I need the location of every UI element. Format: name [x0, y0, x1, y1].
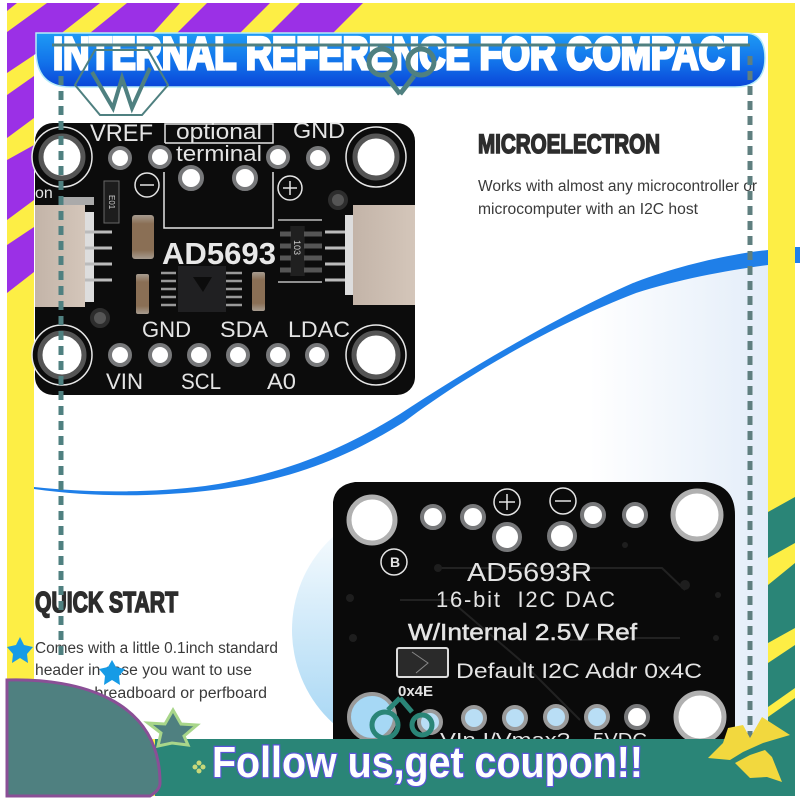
silkscreen labels: VREF — [90, 120, 153, 147]
resistor E01 — [104, 181, 119, 223]
silkscreen text: 0x4E — [398, 683, 433, 700]
silkscreen labels: SCL — [181, 369, 221, 394]
text block: microelectron description: microcomputer with an I2C host — [478, 201, 699, 218]
silkscreen labels: SDA — [220, 317, 268, 342]
terminal outline — [164, 124, 273, 228]
light blue background area under curve — [590, 255, 768, 739]
heading: quick start: QUICK START — [35, 587, 178, 619]
title banner — [36, 28, 765, 87]
text block: microelectron description — [478, 178, 757, 218]
silkscreen text: B — [390, 554, 400, 570]
resistor E01: E01 — [107, 195, 116, 210]
polarity symbols — [135, 173, 302, 200]
part name: AD5693 — [162, 236, 276, 271]
silkscreen text: 5VDC — [593, 730, 647, 750]
rear circuit board — [333, 482, 735, 750]
silkscreen labels: VIN — [106, 369, 143, 394]
silkscreen text: W/Internal 2.5V Ref — [408, 619, 638, 645]
right connector — [325, 205, 415, 305]
resistor array: 103 — [292, 240, 302, 255]
left connector — [35, 197, 112, 307]
watermark knot top — [369, 49, 434, 94]
bottom pads — [110, 345, 327, 365]
icon: blue star middle — [99, 660, 125, 685]
top pads — [422, 504, 646, 550]
icon: teal star — [148, 710, 197, 746]
fiducial dots — [92, 192, 346, 326]
silkscreen labels: A0 — [267, 369, 296, 394]
bottom coupon bar — [155, 739, 795, 796]
silkscreen text — [390, 554, 702, 750]
polarity symbols — [381, 488, 576, 575]
capacitors — [132, 215, 265, 314]
heading: microelectron: MICROELECTRON — [478, 129, 660, 159]
mounting holes — [349, 491, 724, 741]
teal corner circle — [7, 680, 160, 796]
text block: microelectron description: Works with almost any microcontroller or — [478, 178, 757, 195]
silkscreen labels: optional — [176, 119, 262, 144]
silkscreen labels: LDAC — [288, 317, 350, 342]
icon: small flower — [192, 760, 206, 774]
silkscreen text: Default I2C Addr 0x4C — [456, 660, 702, 683]
DAC chip — [161, 266, 242, 312]
text block: quick start description: it with a breadboard or perfboard — [36, 685, 267, 702]
board body — [35, 123, 415, 395]
top pads — [110, 147, 328, 189]
watermark knot bottom — [372, 698, 432, 738]
silkscreen text: 16-bit I2C DAC — [436, 587, 615, 612]
icon: yellow leaves — [708, 717, 790, 782]
jumper box — [397, 648, 448, 677]
watermark dashed guide lines — [52, 45, 750, 738]
silkscreen text: AD5693R — [467, 557, 592, 587]
purple diagonal stripes on frame — [7, 3, 363, 293]
vias — [346, 542, 721, 642]
silkscreen text: VIn I/Vmax? — [440, 730, 570, 750]
text block: quick start description: Comes with a little 0.1inch standard — [35, 640, 278, 657]
text block: quick start description — [35, 640, 278, 702]
silkscreen labels: GND — [142, 317, 191, 342]
banner pill — [36, 33, 765, 87]
silkscreen labels — [35, 118, 350, 394]
green and yellow striped right edge — [768, 497, 795, 739]
silkscreen labels: terminal — [176, 141, 262, 166]
traces — [400, 568, 685, 720]
front circuit board — [32, 118, 415, 395]
blue curve — [34, 250, 768, 495]
follow us text: Follow us,get coupon!! — [212, 738, 643, 787]
bottom pads — [419, 706, 648, 733]
board body — [333, 482, 735, 745]
blue curve fragment at right edge — [795, 247, 800, 263]
resistor array — [278, 220, 322, 282]
silkscreen labels: GND — [293, 118, 345, 143]
watermark diamond logo — [75, 50, 168, 115]
text block: quick start description: header in case you want to use — [35, 662, 252, 679]
light blue circle behind rear board — [292, 537, 333, 723]
silkscreen labels: on — [35, 185, 53, 202]
mounting holes — [32, 127, 406, 385]
icon: blue star left — [7, 637, 33, 663]
